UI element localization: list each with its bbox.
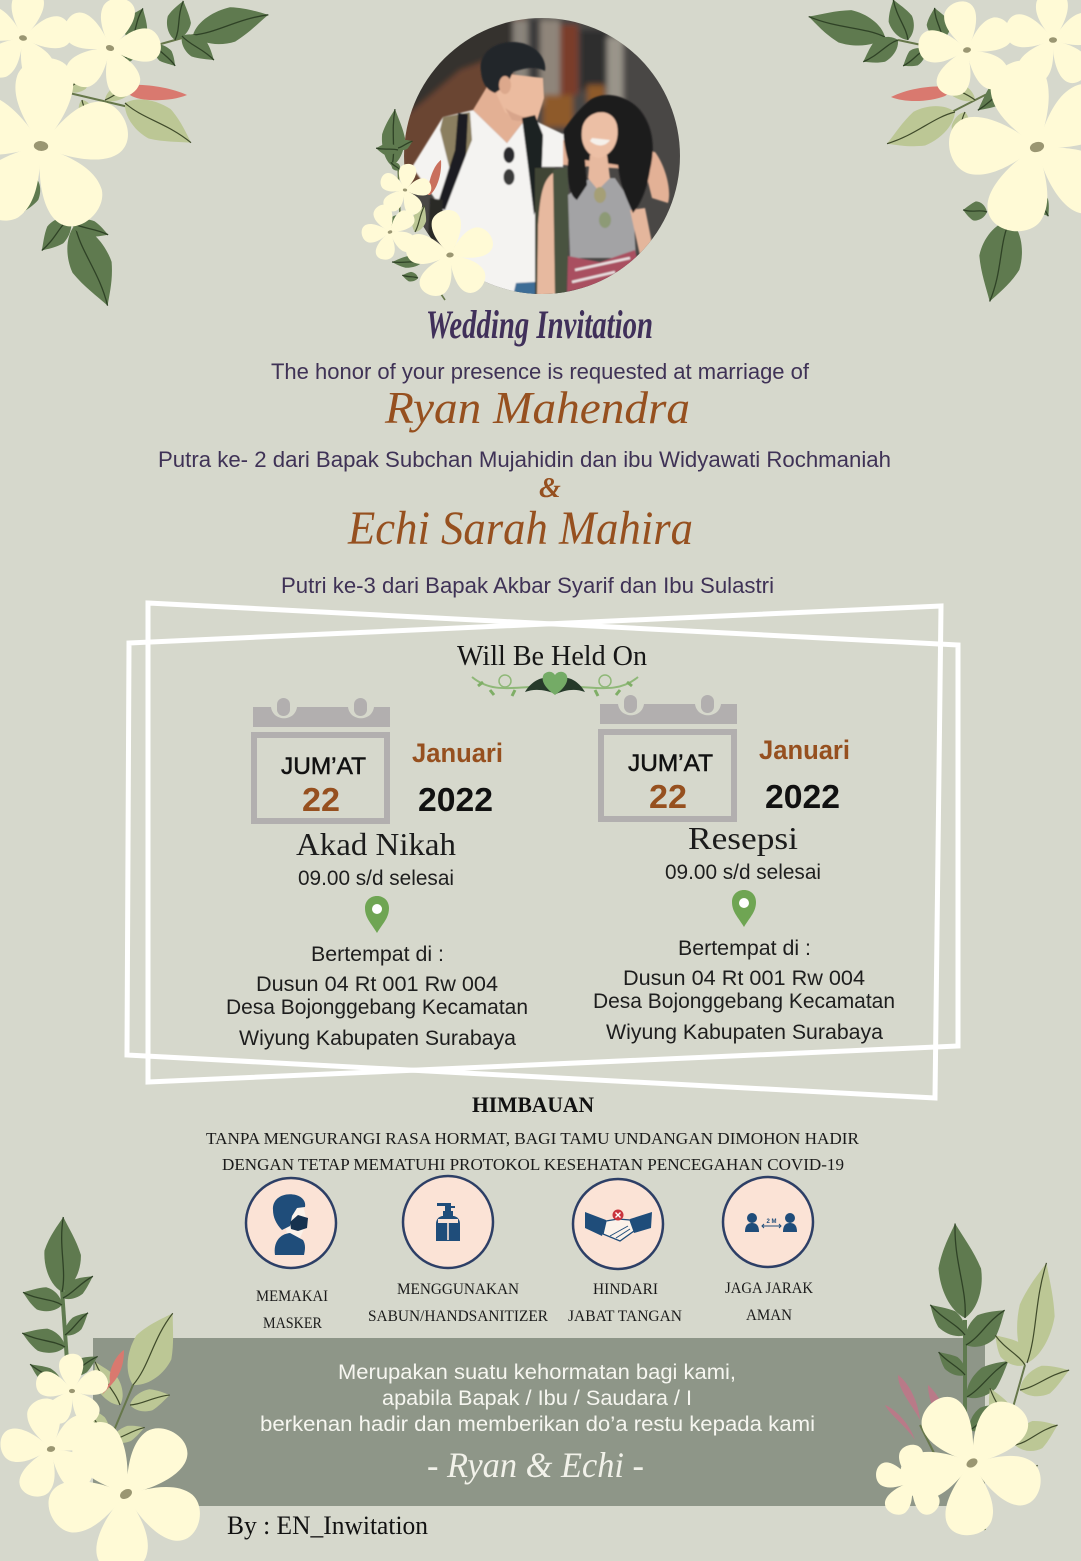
icon: location pin	[732, 890, 756, 927]
icon captions: JABAT TANGAN	[568, 1308, 682, 1325]
closing message: apabila Bapak / Ibu / Saudara / I	[382, 1387, 692, 1410]
closing band	[93, 1338, 985, 1506]
resepsi address: Dusun 04 Rt 001 Rw 004	[623, 967, 865, 990]
photo of the couple	[400, 15, 685, 300]
month and year: akad: Januari	[412, 738, 503, 768]
sunglasses	[504, 147, 514, 163]
icon captions: AMAN	[746, 1307, 792, 1324]
closing message: Merupakan suatu kehormatan bagi kami,	[338, 1361, 736, 1384]
akad address: Desa Bojonggebang Kecamatan	[226, 996, 528, 1019]
month and year: akad	[412, 738, 503, 818]
month and year: resepsi: Januari	[759, 735, 850, 765]
groom parents: Putra ke- 2 dari Bapak Subchan Mujahidin dan ibu Widyawati Rochmaniah	[158, 447, 891, 472]
calendar: akad nikah	[253, 698, 390, 821]
himbauan text: DENGAN TETAP MEMATUHI PROTOKOL KESEHATAN PENCEGAHAN COVID-19	[222, 1155, 844, 1174]
icon captions: MASKER	[263, 1315, 323, 1332]
man shirt	[412, 110, 565, 296]
gap between the couple	[534, 167, 555, 294]
icon: keep distance: 2 M	[766, 1219, 777, 1225]
man arm behind the woman	[563, 140, 669, 203]
resepsi address: Bertempat di :	[678, 937, 811, 960]
icon captions: HINDARI	[593, 1281, 658, 1298]
month and year: resepsi	[759, 735, 850, 815]
akad address	[226, 943, 528, 1050]
woman hair	[564, 95, 653, 213]
icon: keep distance	[723, 1177, 813, 1267]
couple signature: - Ryan & Echi -	[427, 1445, 644, 1485]
month and year: akad: 2022	[418, 781, 493, 818]
icon: no handshake	[573, 1179, 663, 1269]
groom name: Ryan Mahendra	[384, 382, 690, 433]
bride parents: Putri ke-3 dari Bapak Akbar Syarif dan Ibu Sulastri	[281, 573, 774, 598]
closing message: berkenan hadir dan memberikan do’a restu kepada kami	[260, 1413, 815, 1436]
white frames	[127, 603, 958, 1098]
plaid skirt	[567, 250, 638, 292]
resepsi time: 09.00 s/d selesai	[665, 861, 821, 884]
month and year: resepsi: 2022	[765, 778, 840, 815]
icon: face mask	[246, 1178, 336, 1268]
himbauan heading: HIMBAUAN	[472, 1092, 594, 1117]
icon captions: SABUN/HANDSANITIZER	[368, 1308, 549, 1325]
floral corner: top right	[804, 0, 1081, 307]
akad address: Dusun 04 Rt 001 Rw 004	[256, 973, 498, 996]
request line: The honor of your presence is requested at marriage of	[271, 359, 810, 384]
calendar: resepsi: JUM’AT	[628, 750, 713, 777]
woman top and right arm	[568, 178, 636, 258]
icon captions: MEMAKAI	[256, 1288, 328, 1305]
resepsi heading: Resepsi	[688, 820, 798, 856]
ampersand: &	[539, 473, 561, 504]
calendar: akad nikah: 22	[302, 781, 340, 818]
akad time: 09.00 s/d selesai	[298, 867, 454, 890]
himbauan text	[206, 1129, 860, 1174]
calendar: resepsi	[600, 695, 737, 819]
floral accent on the photo	[352, 108, 501, 305]
man neck and face	[473, 85, 527, 143]
icon captions	[256, 1280, 814, 1332]
woman face and neck	[588, 155, 610, 190]
icon: hand sanitizer	[403, 1176, 493, 1268]
credit: By : EN_Inwitation	[227, 1511, 428, 1540]
akad address: Bertempat di :	[311, 943, 444, 966]
akad nikah heading: Akad Nikah	[296, 826, 456, 862]
icon captions: JAGA JARAK	[725, 1280, 814, 1297]
icon captions: MENGGUNAKAN	[397, 1281, 519, 1298]
himbauan text: TANPA MENGURANGI RASA HORMAT, BAGI TAMU UNDANGAN DIMOHON HADIR	[206, 1129, 860, 1148]
backpack straps	[440, 112, 472, 170]
calendar: akad nikah: JUM’AT	[281, 753, 366, 780]
heart ornament	[472, 672, 638, 696]
bride name: Echi Sarah Mahira	[347, 502, 693, 555]
closing message	[260, 1361, 815, 1436]
resepsi address	[593, 937, 895, 1044]
calendar: resepsi: 22	[649, 778, 687, 815]
resepsi address: Wiyung Kabupaten Surabaya	[606, 1021, 883, 1044]
floral corner: top left	[0, 0, 273, 313]
icon: location pin	[365, 896, 389, 933]
floral corner: bottom right	[869, 1221, 1075, 1561]
woman arm	[537, 173, 560, 296]
title: Wedding Invitation	[426, 302, 653, 347]
akad address: Wiyung Kabupaten Surabaya	[239, 1027, 516, 1050]
resepsi address: Desa Bojonggebang Kecamatan	[593, 990, 895, 1013]
floral corner: bottom left	[0, 1217, 237, 1561]
heading: will be held on: Will Be Held On	[457, 640, 647, 672]
